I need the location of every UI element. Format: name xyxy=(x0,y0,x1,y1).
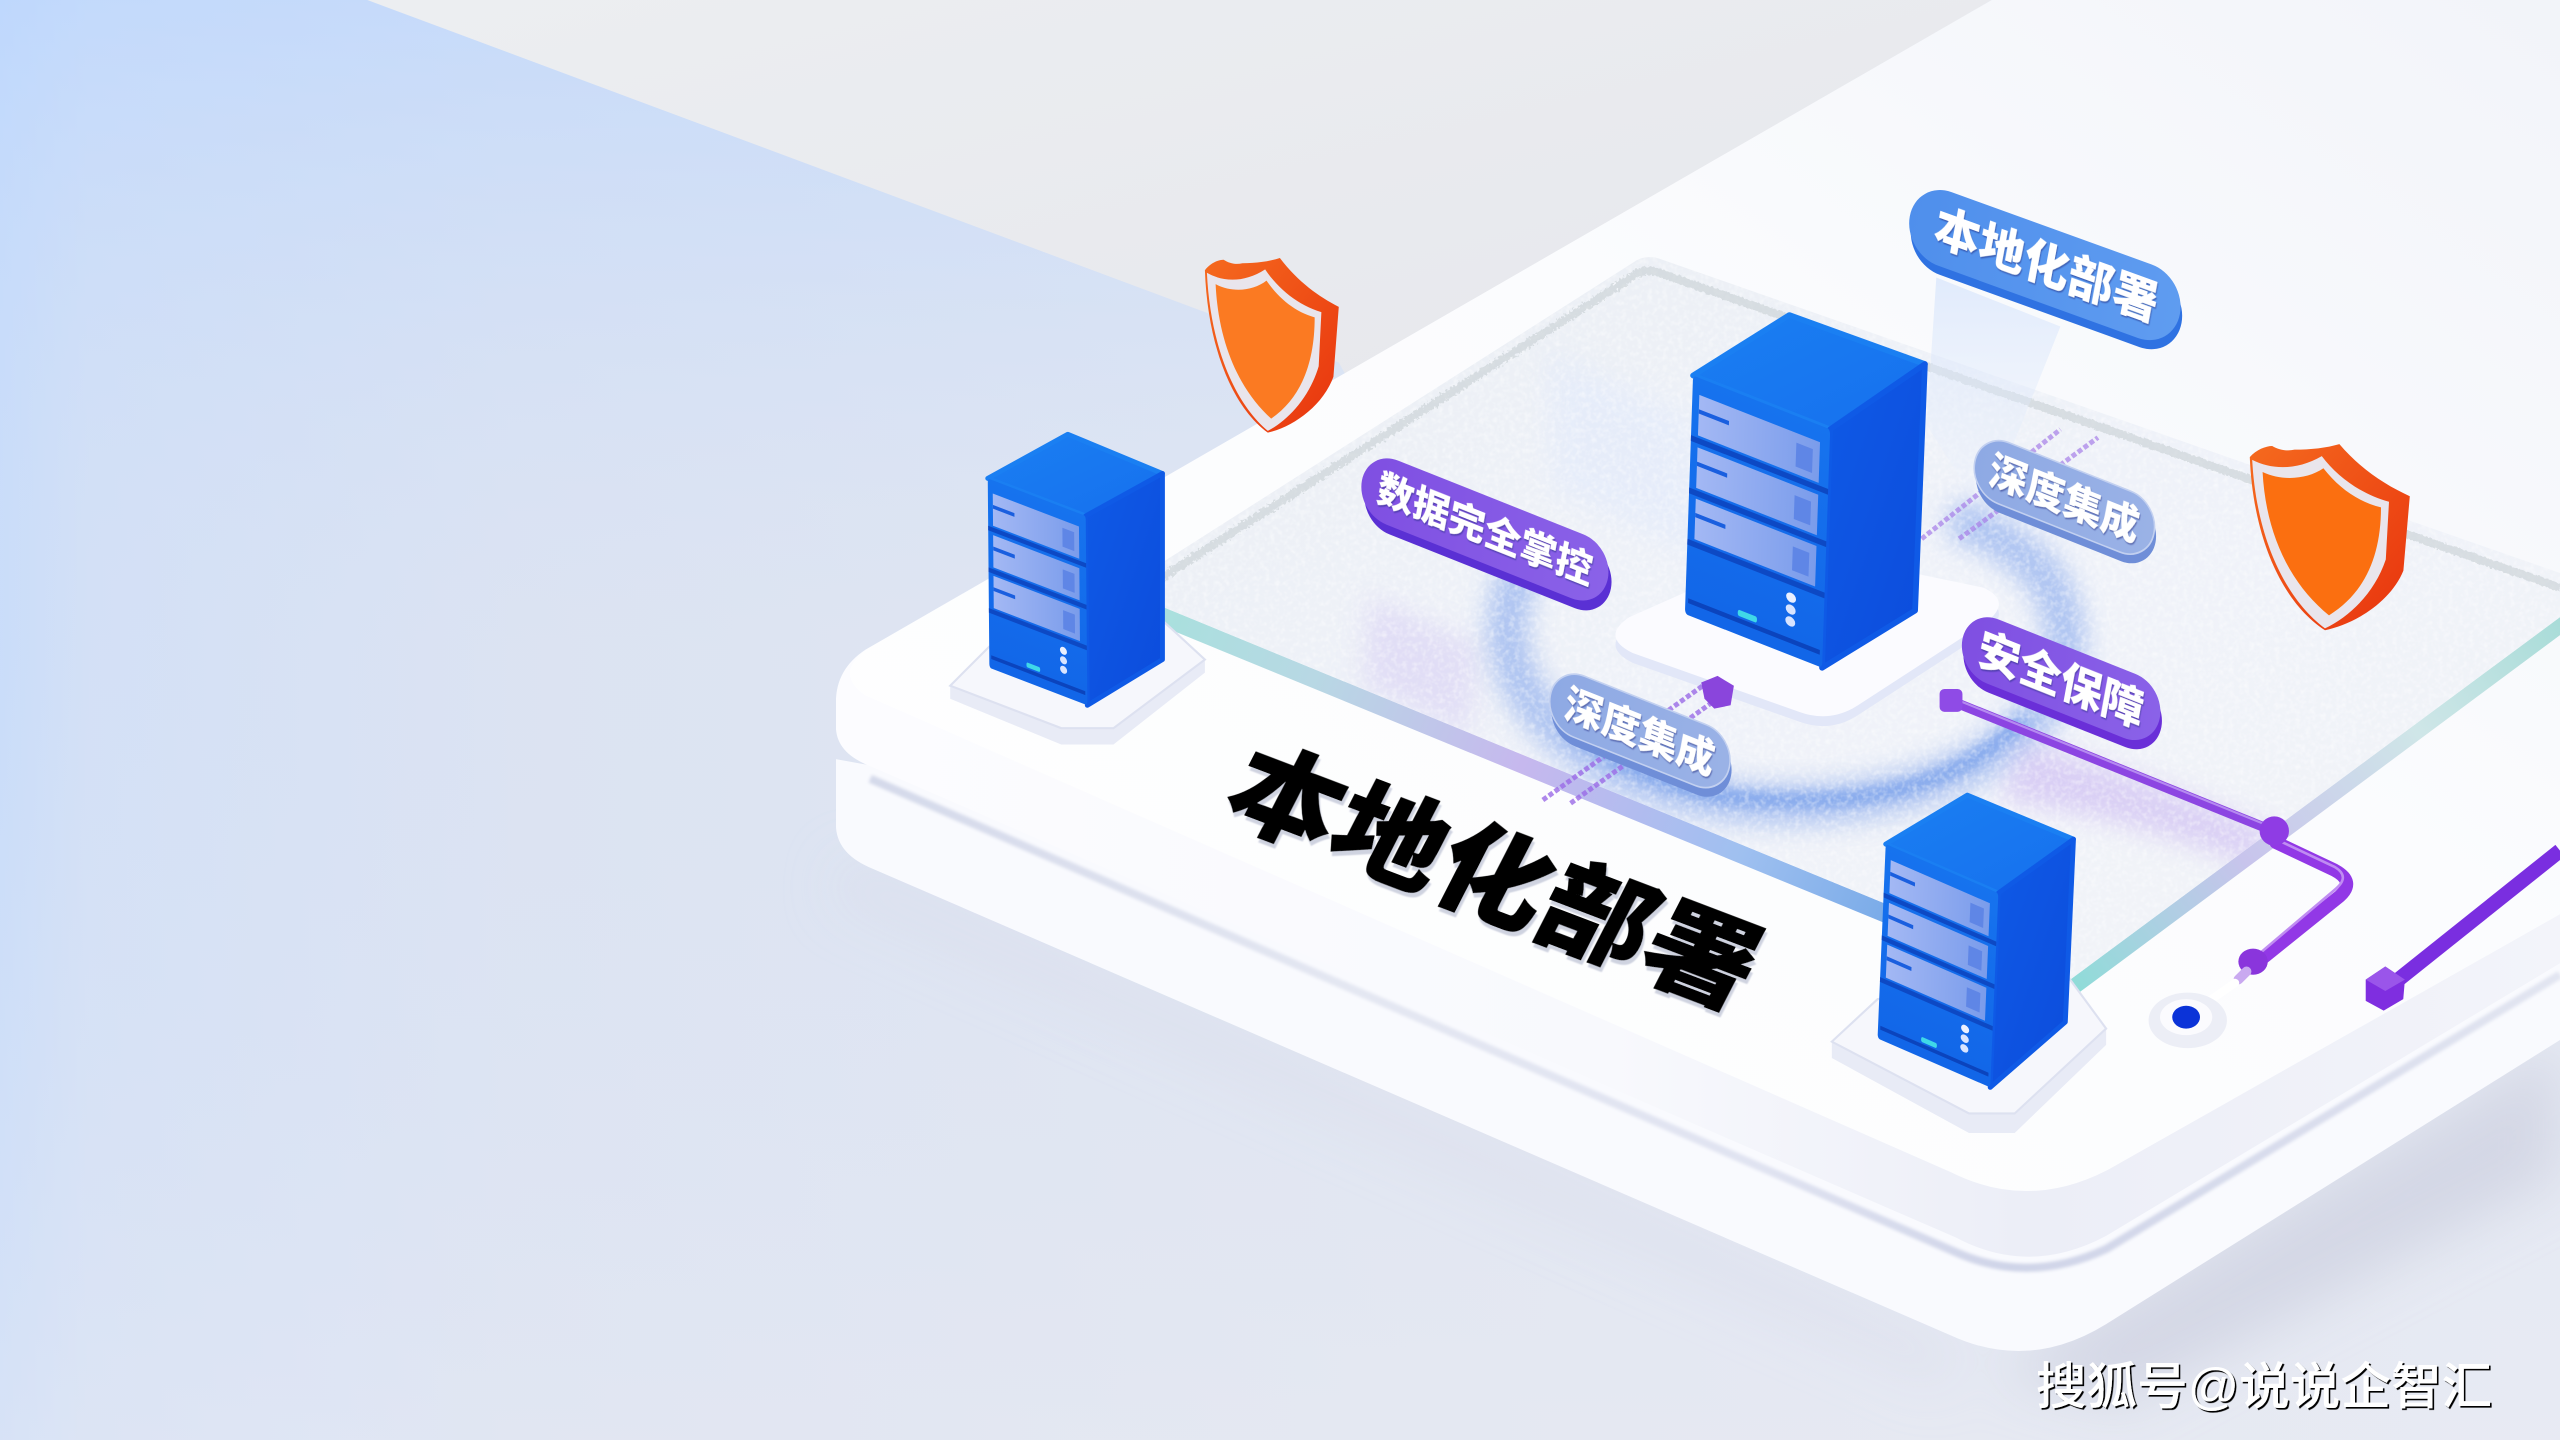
watermark: 搜狐号@说说企智汇 xyxy=(2036,1358,2492,1415)
label pill: 数据完全掌控 (purple) xyxy=(1355,449,1618,620)
pedestal: left server base xyxy=(950,620,1205,744)
label pill: 本地化部署 (top, blue) xyxy=(1902,179,2190,360)
icon: left server xyxy=(988,434,1162,705)
faint connector behind lower label xyxy=(1543,676,1734,803)
glass top surface xyxy=(1120,257,2560,980)
background: grey wall xyxy=(367,0,1992,392)
label pill: 深度集成 (lower, glass) xyxy=(1543,665,1738,806)
glass glow and ring xyxy=(1278,302,2264,865)
label pill: 深度集成 (upper, glass): 深度集成 xyxy=(1986,447,2143,550)
platform groove xyxy=(870,779,2560,1268)
icon: center server xyxy=(1685,315,1925,668)
label pill: 安全保障 (purple) xyxy=(1955,607,2169,759)
label pill: 深度集成 (upper, glass) xyxy=(1968,431,2163,573)
platform top face xyxy=(850,0,2560,1191)
glass front edge xyxy=(1120,589,2070,999)
label pill: 本地化部署 (top, blue): 本地化部署 xyxy=(1930,200,2162,333)
connector: right edge purple rod xyxy=(2366,851,2560,1011)
floor shadow of the platform xyxy=(833,857,2560,1404)
connector: security rod on glass xyxy=(1940,689,2269,829)
port: blue dot xyxy=(2149,993,2227,1048)
icon: right shield xyxy=(2250,444,2410,630)
label pill: 数据完全掌控 (purple): 数据完全掌控 xyxy=(1374,466,1596,594)
light beam from top label xyxy=(1927,278,2060,490)
faint connector behind upper label xyxy=(1922,429,2098,539)
panel: glass plate xyxy=(1164,257,2560,992)
glass right edge xyxy=(2070,617,2560,999)
platform: upper slab xyxy=(836,0,2560,1257)
label pill: 深度集成 (lower, glass): 深度集成 xyxy=(1561,680,1718,784)
title: 本地化部署 on platform: 本地化部署 xyxy=(1208,729,1779,1029)
icon: left shield xyxy=(1205,258,1339,433)
platform: lower slab xyxy=(836,759,2560,1351)
icon: right server xyxy=(1878,795,2073,1087)
connector: purple pipe to port xyxy=(2198,816,2347,1009)
center platform under server xyxy=(1615,547,1999,726)
glass textured rim xyxy=(1146,271,2560,588)
label pill: 安全保障 (purple): 安全保障 xyxy=(1974,624,2147,737)
pedestal: right server base xyxy=(1832,973,2106,1133)
